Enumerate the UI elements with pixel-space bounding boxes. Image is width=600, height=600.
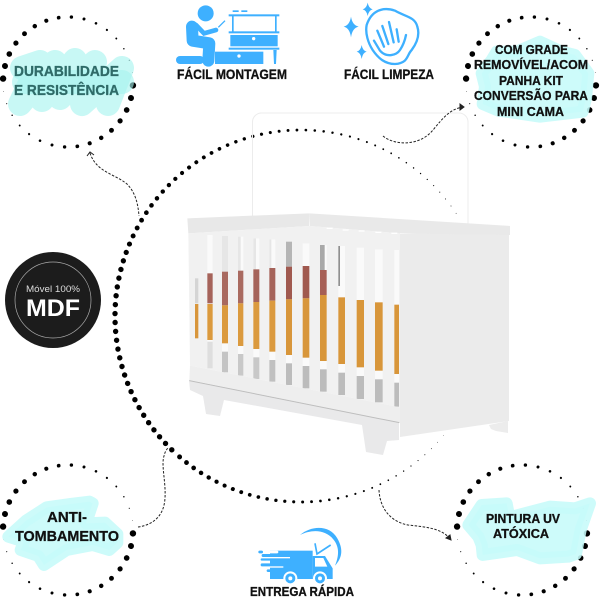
- dotted ring top left: [0, 15, 136, 149]
- callout text: durabilidade: DURABILIDADE: [14, 63, 119, 80]
- callout text: anti-tombamento: TOMBAMENTO: [15, 528, 119, 545]
- slat gap 7: [286, 242, 292, 385]
- slat gap upper shading: [222, 236, 271, 272]
- slat gap top and lower white backing: [207, 235, 399, 407]
- arrow: durabilidade to crib: [87, 152, 139, 216]
- callout text: pintura UV: [486, 511, 560, 541]
- slat gap 10: [338, 246, 345, 395]
- acrylic panel behind crib: [252, 113, 468, 224]
- crib bottom rail: [189, 366, 400, 423]
- brush highlight top left: [20, 60, 122, 104]
- slat gap 1: [195, 278, 198, 338]
- dotted ring bottom right: [454, 463, 590, 597]
- dotted ring top right: [463, 15, 599, 149]
- large dotted ring around crib: [112, 129, 457, 503]
- slat gap 4: [238, 271, 243, 376]
- dotted ring bottom left: [0, 463, 136, 597]
- brush highlight top right: [482, 42, 588, 117]
- callout text: pintura UV: ATÓXICA: [493, 526, 550, 541]
- callout text: pintura UV: PINTURA UV: [486, 511, 560, 526]
- icon: delivery truck: [258, 528, 341, 585]
- callout text: durabilidade: [14, 63, 119, 99]
- callout text: grade removível: MINI CAMA: [497, 104, 565, 119]
- callout text: grade removível: COM GRADE: [495, 42, 568, 57]
- callout text: durabilidade: E RESISTÊNCIA: [14, 81, 119, 99]
- slat gap 2: [207, 273, 213, 368]
- callout text: grade removível: PANHA KIT: [499, 73, 563, 88]
- slat gap 3: [222, 272, 228, 372]
- crib front frame and slat gaps: [187, 213, 510, 423]
- MDF badge: MDF: [26, 295, 80, 322]
- slat gap 13: [394, 305, 399, 407]
- label: fácil montagem: FÁCIL MONTAGEM: [177, 67, 287, 82]
- callout text: grade removível: [474, 42, 589, 119]
- arrow: crib to grade removível: [383, 104, 464, 143]
- slat gap 12: [375, 302, 383, 402]
- brush highlight bottom left: [8, 502, 117, 565]
- slat gap 8: [303, 266, 309, 388]
- MDF badge: [5, 252, 101, 348]
- crib: [187, 213, 510, 455]
- icon: cleaning hand: [344, 3, 418, 64]
- slat gap 11: [357, 300, 364, 399]
- crib right foot: [489, 421, 508, 433]
- callout text: grade removível: CONVERSÃO PARA: [474, 88, 589, 103]
- crib side panel: [400, 231, 509, 437]
- callout text: anti-tombamento: ANTI-: [47, 509, 87, 526]
- slat gap 5: [253, 269, 259, 379]
- arrow: crib to anti-tombamento: [138, 448, 168, 527]
- slat gap 6: [269, 268, 275, 382]
- callout text: anti-tombamento: [15, 509, 119, 545]
- arrow: crib to pintura UV: [379, 490, 451, 540]
- label: fácil limpeza: FÁCIL LIMPEZA: [344, 67, 434, 82]
- callout text: grade removível: REMOVÍVEL/ACOM: [474, 57, 588, 72]
- crib base and legs: [189, 380, 399, 455]
- MDF badge: Móvel 100%: [26, 284, 80, 294]
- brush highlight bottom right: [468, 503, 590, 558]
- icon: assembly: [180, 5, 279, 64]
- label: entrega rápida: ENTREGA RÁPIDA: [250, 584, 355, 599]
- slat gap 9: [320, 245, 327, 392]
